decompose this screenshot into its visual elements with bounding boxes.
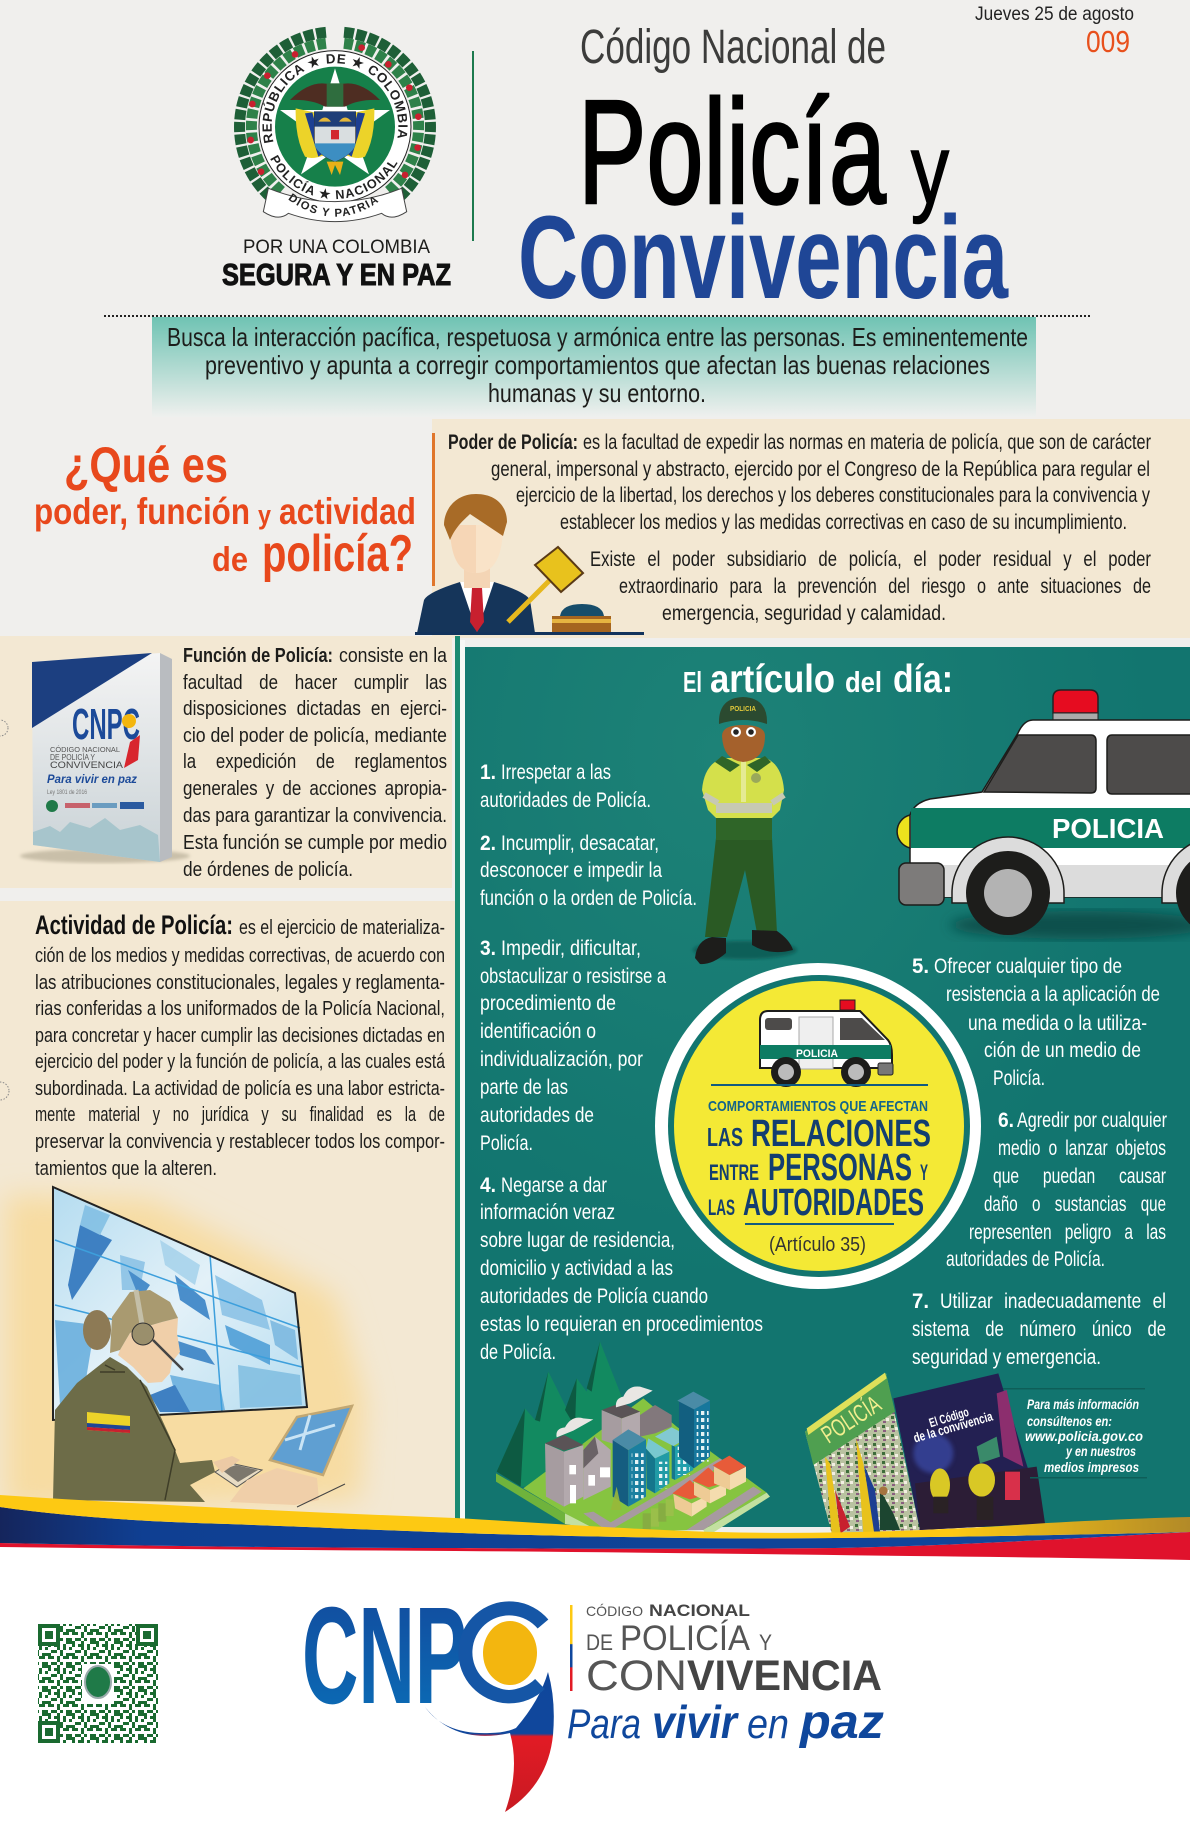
more information note: Para más información (1027, 1397, 1139, 1412)
list: items 1 to 4: Incumplir, desacatar, (501, 832, 659, 855)
list: items 1 to 4: procedimiento de (480, 992, 616, 1015)
panel: actividad de policía: es el ejercicio de materializa- (239, 917, 445, 939)
list: items 1 to 4: sobre lugar de residencia, (480, 1229, 675, 1252)
icon: police crest: DIOS Y PATRIA (288, 193, 378, 217)
list: items 1 to 4: autoridades de (480, 1104, 594, 1127)
panel: función de policía (0, 636, 452, 888)
heading: del (845, 667, 882, 699)
callout: article 35 badge: AUTORIDADES (743, 1182, 924, 1224)
more information note: www.policia.gov.co (1025, 1429, 1143, 1444)
list: items 5 to 7: 6. (998, 1109, 1014, 1132)
more information note: medios impresos (1044, 1460, 1139, 1475)
list: items 1 to 4: 4. (480, 1174, 496, 1197)
heading: what is police power: ¿Qué es (64, 437, 228, 493)
panel: actividad de policía: ejercicio del poder y la función de policía, a las cuales está (35, 1051, 446, 1073)
title: y (911, 114, 949, 224)
heading: what is police power: poder, función (34, 491, 250, 532)
heading: what is police power: actividad (279, 491, 416, 532)
callout: article 35 badge: Y (920, 1160, 928, 1185)
panel: función de policía: la expedición de reglamentos (183, 751, 447, 773)
intro banner (152, 317, 1036, 417)
logo: CNPC (302, 1579, 554, 1812)
callout: article 35 badge: PERSONAS (768, 1147, 912, 1189)
logo tagline (567, 1601, 884, 1749)
crest slogan (222, 237, 451, 292)
icon: CNPC book: DE POLICÍA Y (50, 753, 96, 762)
icon: CNPC book (20, 653, 190, 863)
heading: día: (893, 658, 953, 701)
list: items 1 to 4: 3. (480, 937, 496, 960)
list: items 1 to 4: Irrespetar a las (501, 761, 611, 784)
date and page number (975, 4, 1134, 59)
panel: actividad de policía: tamientos que la alteren. (35, 1158, 217, 1180)
list: items 5 to 7: una medida o la utiliza- (968, 1012, 1147, 1035)
icon: CNPC book: CNPC (72, 700, 140, 749)
list: items 1 to 4: individualización, por (480, 1048, 643, 1071)
illustration: magazines: de la convivencia (912, 1409, 995, 1446)
crest slogan: SEGURA Y EN PAZ (222, 257, 451, 292)
icon: police crest: REPÚBLICA ★ DE ★ COLOMBIA (262, 54, 408, 144)
panel: poder de policía: emergencia, seguridad y calamidad. (662, 602, 946, 625)
logo tagline: NACIONAL (649, 1601, 750, 1620)
panel: función de policía: generales y de acciones apropia- (183, 778, 447, 800)
vertical divider (472, 51, 474, 241)
callout: article 35 badge (655, 963, 981, 1289)
callout: article 35 badge: LAS (708, 1195, 735, 1220)
date and page number: 009 (1086, 24, 1130, 59)
title (518, 21, 1009, 324)
list: items 1 to 4: información veraz (480, 1201, 615, 1224)
more information note (1003, 1388, 1147, 1478)
icon: police car: POLICIA (1052, 813, 1164, 844)
title: Código Nacional de (580, 21, 886, 74)
list: items 5 to 7: autoridades de Policía. (946, 1248, 1105, 1271)
list: items 1 to 4: Negarse a dar (501, 1174, 607, 1197)
logo tagline: Y (759, 1630, 772, 1655)
list: items 1 to 4: parte de las (480, 1076, 568, 1099)
list: items 1 to 4: autoridades de Policía. (480, 789, 651, 812)
panel: poder de policía: Poder de Policía: (448, 431, 578, 454)
heading: artículo (710, 658, 835, 701)
list: items 1 to 4: autoridades de Policía cuando (480, 1285, 708, 1308)
heading (683, 658, 953, 701)
icon: police officer character (693, 697, 797, 964)
logo tagline: CÓDIGO (586, 1603, 643, 1619)
panel: función de policía: disposiciones dictadas en ejerci- (183, 698, 447, 720)
panel: función de policía: Función de Policía: (183, 645, 333, 667)
panel: actividad de policía: las atribuciones constitucionales, legales y reglamenta- (35, 972, 445, 994)
icon: CNPC book: Ley 1801 de 2016 (47, 790, 88, 796)
panel: función de policía: cio del poder de policía, mediante (183, 725, 447, 747)
panel: actividad de policía: preservar la convivencia y restablecer todos los compor- (35, 1131, 445, 1153)
icon: CNPC book: Para vivir en paz (47, 772, 137, 786)
panel: función de policía: de órdenes de policía. (183, 859, 353, 881)
panel: función de policía: Esta función se cumple por medio (183, 832, 447, 854)
panel: función de policía: das para garantizar la convivencia. (183, 805, 447, 827)
heading: what is police power (34, 437, 416, 583)
QR code (38, 1624, 158, 1743)
panel: actividad de policía: Actividad de Policía: (35, 910, 233, 940)
icon: police car (897, 690, 1190, 939)
list: items 5 to 7: seguridad y emergencia. (912, 1346, 1101, 1369)
panel: el artículo del día (465, 647, 1190, 1527)
logo tagline: CON (586, 1652, 687, 1700)
list: items 1 to 4: Impedir, dificultar, (501, 937, 641, 960)
intro banner: humanas y su entorno. (488, 378, 706, 408)
panel: actividad de policía: para concretar y hacer cumplir las decisiones dictadas en (35, 1025, 445, 1047)
illustration: magazines (805, 1373, 1045, 1533)
icon: police van: POLICIA (796, 1048, 838, 1060)
callout: article 35 badge: (Artículo 35) (769, 1234, 866, 1256)
logo: CNPC: CNP (302, 1579, 467, 1733)
callout: article 35 badge: COMPORTAMIENTOS QUE AFECTAN (708, 1098, 928, 1115)
icon: CNPC book: CÓDIGO NACIONAL (50, 745, 120, 754)
more information note: y en nuestros (1065, 1444, 1136, 1459)
title: Policía (578, 70, 886, 235)
list: items 1 to 4: 2. (480, 832, 496, 855)
panel: actividad de policía (0, 901, 455, 1521)
list: items 5 to 7 (912, 955, 1167, 1369)
icon: police crest: POLICÍA ★ NACIONAL (270, 154, 398, 200)
illustration: magazines: POLICÍA (817, 1391, 886, 1449)
panel: función de policía: facultad de hacer cumplir las (183, 672, 447, 694)
white footer area (0, 1538, 1190, 1834)
list: items 1 to 4: domicilio y actividad a las (480, 1257, 673, 1280)
logo tagline: paz (798, 1696, 884, 1749)
logo tagline: en (747, 1700, 789, 1747)
callout: article 35 badge: RELACIONES (751, 1113, 931, 1155)
list: items 1 to 4: 1. (480, 761, 496, 784)
icon: police crest (234, 26, 436, 222)
panel: función de policía: consiste en la (339, 645, 448, 667)
list: items 5 to 7: Policía. (993, 1067, 1045, 1090)
crest slogan: POR UNA COLOMBIA (243, 237, 430, 258)
illustration: officer at control room (5, 1187, 365, 1510)
callout: article 35 badge: LAS (707, 1122, 743, 1152)
heading: what is police power: policía? (262, 525, 413, 583)
icon: police officer character: POLICIA (730, 706, 756, 713)
panel: actividad de policía: mente material y no jurídica y su finalidad es la de (35, 1104, 445, 1126)
logo tagline: Para (567, 1700, 641, 1747)
list: items 1 to 4: obstaculizar o resistirse a (480, 965, 666, 988)
flag ribbon (0, 1495, 1190, 1560)
green divider bar (455, 636, 460, 1521)
logo tagline: vivir (652, 1696, 739, 1748)
heading: what is police power: y (258, 500, 271, 530)
logo tagline: VIVENCIA (687, 1652, 882, 1700)
list: items 1 to 4: desconocer e impedir la (480, 859, 662, 882)
heading: what is police power: de (212, 541, 248, 579)
callout: article 35 badge: ENTRE (709, 1160, 759, 1185)
list: items 5 to 7: 5. (912, 955, 929, 978)
panel: actividad de policía: ción de los medios y medidas correctivas, de acuerdo con (35, 945, 445, 967)
list: items 1 to 4: estas lo requieran en procedimientos (480, 1313, 763, 1336)
icon: judge with gavel (415, 494, 644, 635)
panel: actividad de policía: subordinada. La actividad de policía es una labor estricta- (35, 1078, 445, 1100)
icon: CNPC book: CONVIVENCIA (50, 760, 123, 770)
logo tagline: DE (586, 1630, 613, 1655)
dotted rule (104, 315, 1091, 317)
list: items 5 to 7: ción de un medio de (984, 1039, 1141, 1062)
list: items 1 to 4 (480, 761, 763, 1364)
list: items 5 to 7: Ofrecer cualquier tipo de (934, 955, 1122, 978)
more information note: consúltenos en: (1027, 1414, 1112, 1429)
date and page number: Jueves 25 de agosto (975, 4, 1134, 25)
logo tagline: POLICÍA (620, 1619, 751, 1658)
illustration: magazines: El Código (927, 1405, 971, 1430)
panel: poder de policía (432, 419, 1190, 638)
illustration: isometric city (496, 1342, 770, 1537)
list: items 1 to 4: identificación o (480, 1020, 596, 1043)
list: items 1 to 4: función o la orden de Policía. (480, 887, 697, 910)
list: items 5 to 7: 7. (912, 1290, 929, 1313)
icon: police van (760, 1000, 893, 1087)
list: items 1 to 4: Policía. (480, 1132, 533, 1155)
list: items 1 to 4: de Policía. (480, 1341, 556, 1364)
intro banner: preventivo y apunta a corregir comportamientos que afectan las buenas relaciones (205, 350, 990, 380)
heading: El (683, 667, 702, 699)
panel: actividad de policía: rias conferidas a los uniformados de la Policía Nacional, (35, 998, 445, 1020)
